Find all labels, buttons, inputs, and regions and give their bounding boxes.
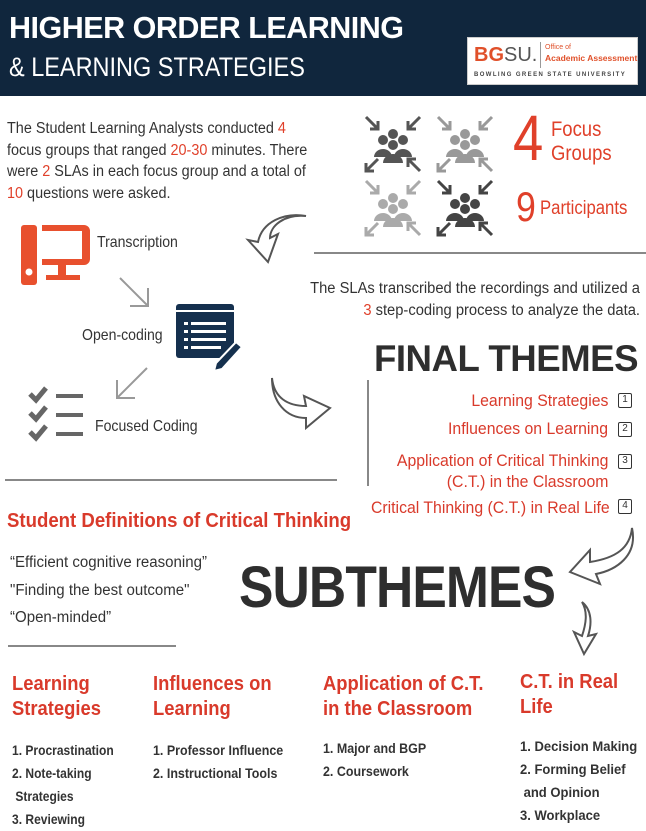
column: learning strategies: 1. Procrastination	[12, 742, 114, 758]
header banner	[0, 0, 646, 96]
stat: 4 focus groups	[513, 102, 612, 174]
title: HIGHER ORDER LEARNING	[9, 11, 404, 45]
label: transcription: Transcription	[97, 234, 178, 251]
heading: student definitions: Student Definitions of Critical Thinking	[7, 510, 351, 532]
column: real life: Life	[520, 696, 553, 718]
column: real life: and Opinion	[524, 784, 600, 800]
subtitle: & LEARNING STRATEGIES	[9, 52, 305, 82]
themes list: 2	[622, 423, 628, 434]
logo box: Office of	[545, 44, 571, 51]
logo box	[467, 37, 638, 85]
column: application: in the Classroom	[323, 698, 472, 720]
icon: focus groups grid	[364, 116, 493, 236]
arrow: down	[572, 601, 598, 656]
logo box: BOWLING GREEN STATE UNIVERSITY	[474, 72, 626, 78]
column: real life: 2. Forming Belief	[520, 761, 626, 777]
themes list: (C.T.) in the Classroom	[446, 472, 608, 491]
stat: 9 participants: 9	[516, 183, 536, 230]
column: learning strategies: 3. Reviewing	[12, 811, 85, 827]
column: influences: Learning	[153, 698, 231, 720]
SLA process text	[310, 280, 640, 319]
column: application	[323, 673, 483, 779]
quotes: "Finding the best outcome"	[10, 582, 190, 598]
heading: final themes: FINAL THEMES	[374, 338, 638, 379]
arrow: curved right	[271, 378, 332, 430]
logo box: BGSU.	[474, 44, 537, 66]
column: learning strategies: Strategies	[15, 788, 74, 804]
column: real life: C.T. in Real	[520, 671, 618, 693]
column: application: 1. Major and BGP	[323, 740, 426, 756]
column: influences: 2. Instructional Tools	[153, 765, 277, 781]
intro text	[7, 120, 307, 202]
quotes: “Open-minded”	[10, 609, 111, 626]
logo box: Academic Assessment	[545, 53, 637, 63]
label: focused coding: Focused Coding	[95, 418, 198, 435]
intro text: focus groups that ranged 20-30 minutes. There	[7, 142, 307, 158]
intro text: 10 questions were asked.	[7, 184, 170, 202]
column: learning strategies: Strategies	[12, 698, 101, 720]
SLA process text: 3 step-coding process to analyze the data.	[363, 302, 640, 319]
column: influences	[153, 673, 283, 781]
themes list: 1	[622, 394, 628, 405]
themes list: 3	[622, 455, 628, 466]
column: influences: Influences on	[153, 673, 272, 695]
themes list: Learning Strategies	[471, 391, 608, 410]
icon: document	[176, 304, 240, 370]
column: learning strategies: Learning	[12, 673, 90, 695]
arrow: curved to transcription	[245, 214, 306, 264]
themes list: Critical Thinking (C.T.) in Real Life	[371, 498, 610, 517]
quotes	[10, 554, 207, 626]
column: application: Application of C.T.	[323, 673, 483, 695]
stat: 4 focus groups: Focus	[551, 118, 601, 141]
stat: 4 focus groups: Groups	[551, 142, 612, 165]
column: real life: 3. Workplace	[520, 807, 600, 823]
heading: subthemes: SUBTHEMES	[239, 555, 555, 620]
themes list	[371, 391, 632, 517]
themes list: Application of Critical Thinking	[396, 451, 608, 470]
column: real life: 1. Decision Making	[520, 738, 637, 754]
themes list: 4	[622, 500, 628, 511]
arrow: down-left	[116, 367, 148, 399]
quotes: “Efficient cognitive reasoning”	[10, 554, 207, 571]
label: open-coding: Open-coding	[82, 327, 163, 344]
column: application: 2. Coursework	[323, 763, 409, 779]
SLA process text: The SLAs transcribed the recordings and utilized a	[310, 280, 640, 297]
icon: computer	[21, 225, 90, 285]
intro text: The Student Learning Analysts conducted 4	[7, 120, 286, 137]
icon: checklist	[28, 386, 83, 442]
arrow: down-right	[119, 277, 149, 307]
column: influences: 1. Professor Influence	[153, 742, 283, 758]
column: learning strategies	[12, 673, 114, 827]
column: learning strategies: 2. Note-taking	[12, 765, 92, 781]
intro text: were 2 SLAs in each focus group and a total of	[7, 163, 306, 180]
arrow: curved to subthemes	[568, 528, 634, 586]
stat: 4 focus groups: 4	[513, 102, 543, 174]
column: real life	[520, 671, 637, 823]
stat: 9 participants: Participants	[540, 198, 627, 219]
stat: 9 participants	[516, 183, 627, 230]
themes list: Influences on Learning	[448, 419, 608, 438]
